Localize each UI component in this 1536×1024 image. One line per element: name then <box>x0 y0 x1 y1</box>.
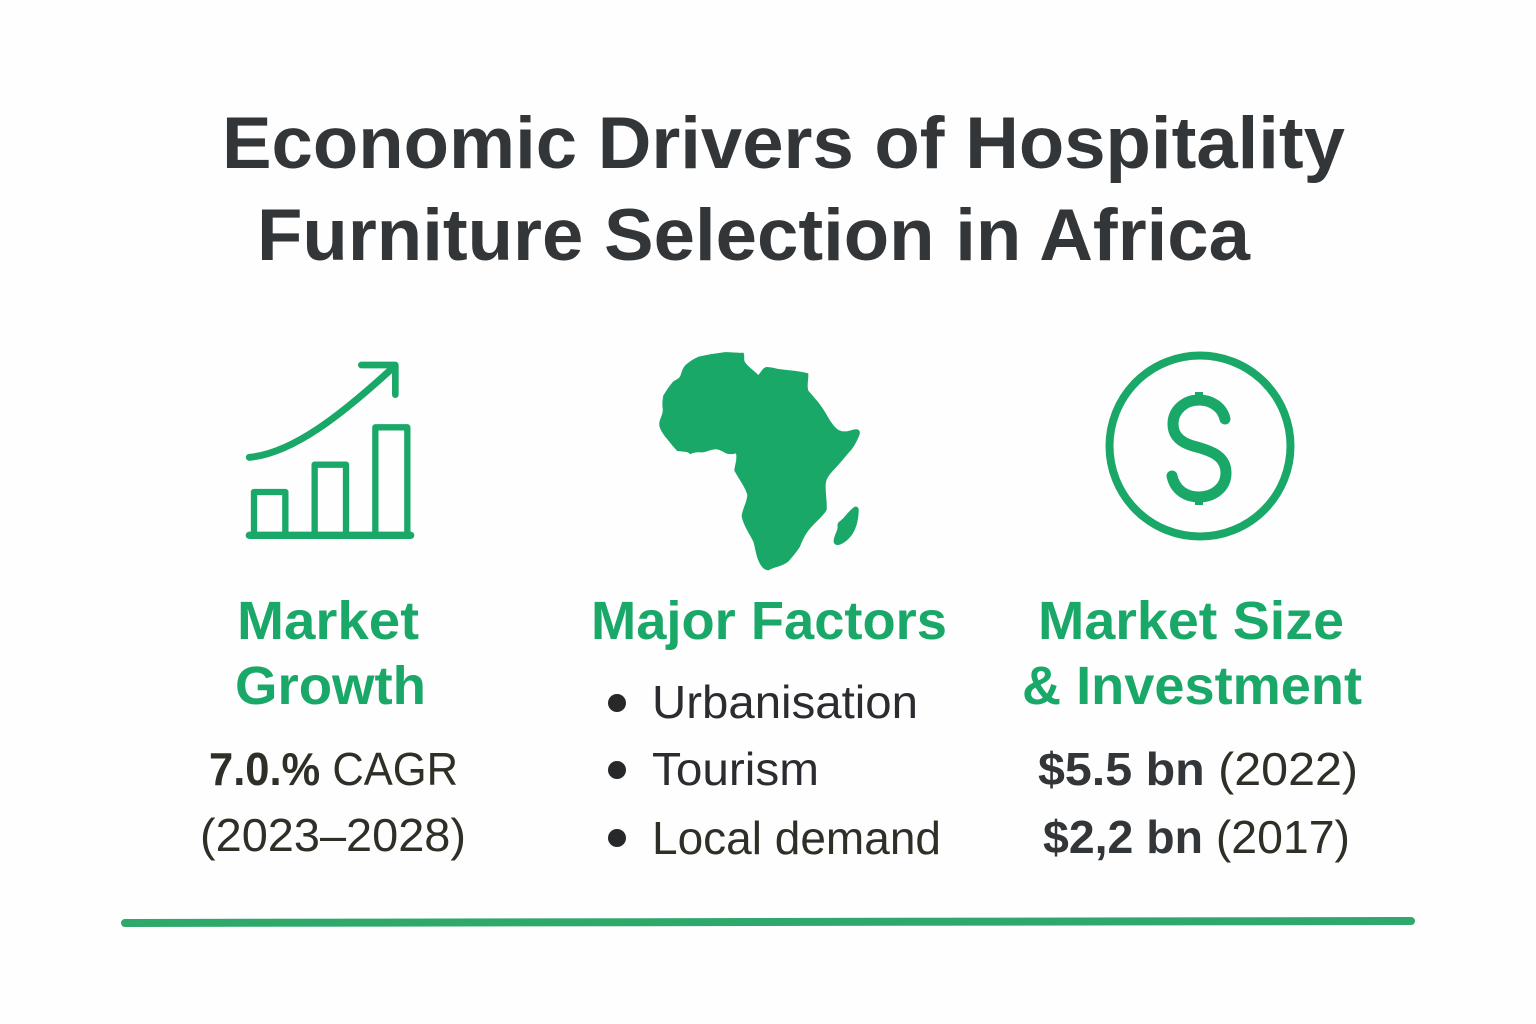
title <box>222 103 1345 276</box>
icon: dollar coin <box>1110 356 1290 536</box>
panel: market growth <box>200 365 466 861</box>
text: CAGR figures: 7.0.% CAGR <box>209 743 458 795</box>
title: Economic Drivers of Hospitality <box>222 103 1345 184</box>
heading: market size and investment: Market Size <box>1038 591 1344 651</box>
heading: market size and investment <box>1022 591 1362 716</box>
divider line <box>125 921 1411 923</box>
heading: market size and investment: & Investment <box>1022 656 1362 716</box>
text: CAGR figures <box>200 743 466 861</box>
panel: market size and investment <box>1022 356 1362 863</box>
heading: major factors: Major Factors <box>591 591 947 651</box>
text: market size figures <box>1038 743 1358 863</box>
heading: market growth: Growth <box>235 656 426 716</box>
list: factors: Urbanisation <box>652 676 918 728</box>
list: factors: Tourism <box>652 743 819 795</box>
icon: map of Africa <box>659 352 860 570</box>
text: market size figures: $2,2 bn (2017) <box>1043 811 1350 863</box>
icon: bar chart with rising arrow <box>249 365 411 535</box>
text: market size figures: $5.5 bn (2022) <box>1038 743 1358 795</box>
panel: major factors <box>591 352 947 864</box>
heading: market growth: Market <box>237 591 419 651</box>
title: Furniture Selection in Africa <box>257 195 1251 276</box>
list: factors <box>608 676 941 864</box>
heading: market growth <box>235 591 426 716</box>
list: factors: Local demand <box>652 812 941 864</box>
text: CAGR figures: (2023–2028) <box>200 809 466 861</box>
